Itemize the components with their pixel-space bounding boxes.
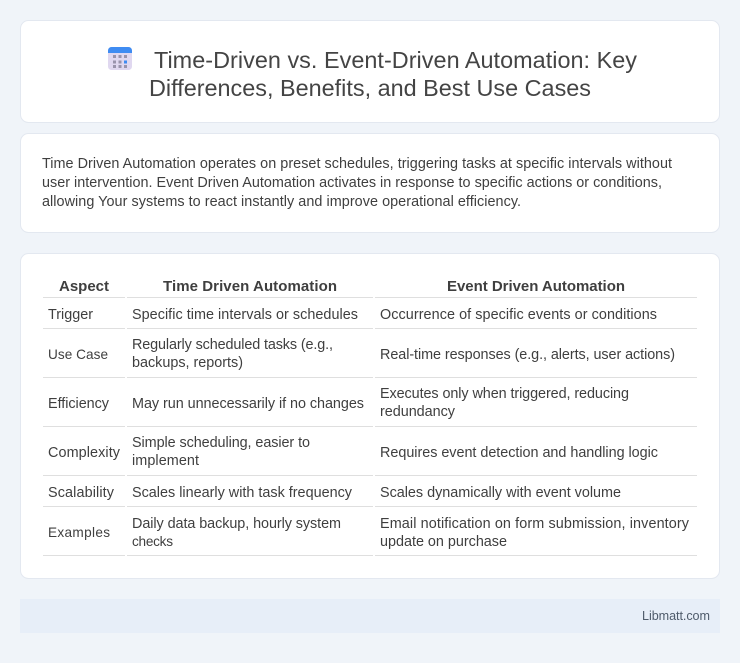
row: trigger [48,307,657,323]
title: Time-Driven vs. Event-Driven Automation: Key [154,47,637,73]
text block: introduction: allowing Your systems to react instantly and improve operational efficiency. [42,194,521,210]
text block: introduction [42,156,672,210]
row: examples: Examples [48,525,110,540]
row: efficiency: May run unnecessarily if no changes [132,396,364,412]
title [149,47,637,101]
icon: calendar [108,47,132,70]
row: use case: Real-time responses (e.g., alerts, user actions) [380,347,675,363]
row: complexity: implement [132,453,199,469]
row: efficiency: Efficiency [48,396,110,412]
row: use case: backups, reports) [132,355,243,371]
row: efficiency [48,386,629,420]
row: scalability: Scales dynamically with event volume [380,485,621,501]
row: trigger: Specific time intervals or schedules [132,307,358,323]
text block: introduction: user intervention. Event Driven Automation activates in response to specific actions or conditions, [42,175,662,191]
row: efficiency: redundancy [380,404,456,420]
footer [20,599,720,633]
row: use case: Use Case [48,347,108,362]
table header: Event Driven Automation [447,278,625,295]
row: complexity: Complexity [48,445,121,461]
table header: Time Driven Automation [163,278,337,295]
row: use case: Regularly scheduled tasks (e.g., [132,337,333,353]
row: examples: Daily data backup, hourly system [132,516,341,532]
row: trigger: Occurrence of specific events or conditions [380,307,657,323]
title: Differences, Benefits, and Best Use Cases [149,75,591,101]
row: efficiency: Executes only when triggered, reducing [380,386,629,402]
row: examples: checks [132,534,173,549]
row: use case [48,337,675,371]
row: examples [48,516,690,550]
text block: introduction: Time Driven Automation operates on preset schedules, triggering tasks at specific intervals without [42,156,672,172]
row: scalability: Scales linearly with task frequency [132,485,353,501]
footer text: Libmatt.com [642,609,710,623]
panel: comparison table [20,254,720,578]
row: trigger: Trigger [48,307,93,323]
panel: introduction [20,134,720,232]
row: scalability: Scalability [48,485,115,501]
row: examples: update on purchase [380,534,507,550]
row: examples: Email notification on form submission, inventory [380,516,690,532]
row: scalability [48,485,621,501]
panel: title header [20,20,720,122]
row: complexity: Simple scheduling, easier to [132,435,310,451]
table header: Aspect [59,278,109,295]
table header [59,278,625,295]
row: complexity [48,435,658,469]
row: complexity: Requires event detection and handling logic [380,445,658,461]
